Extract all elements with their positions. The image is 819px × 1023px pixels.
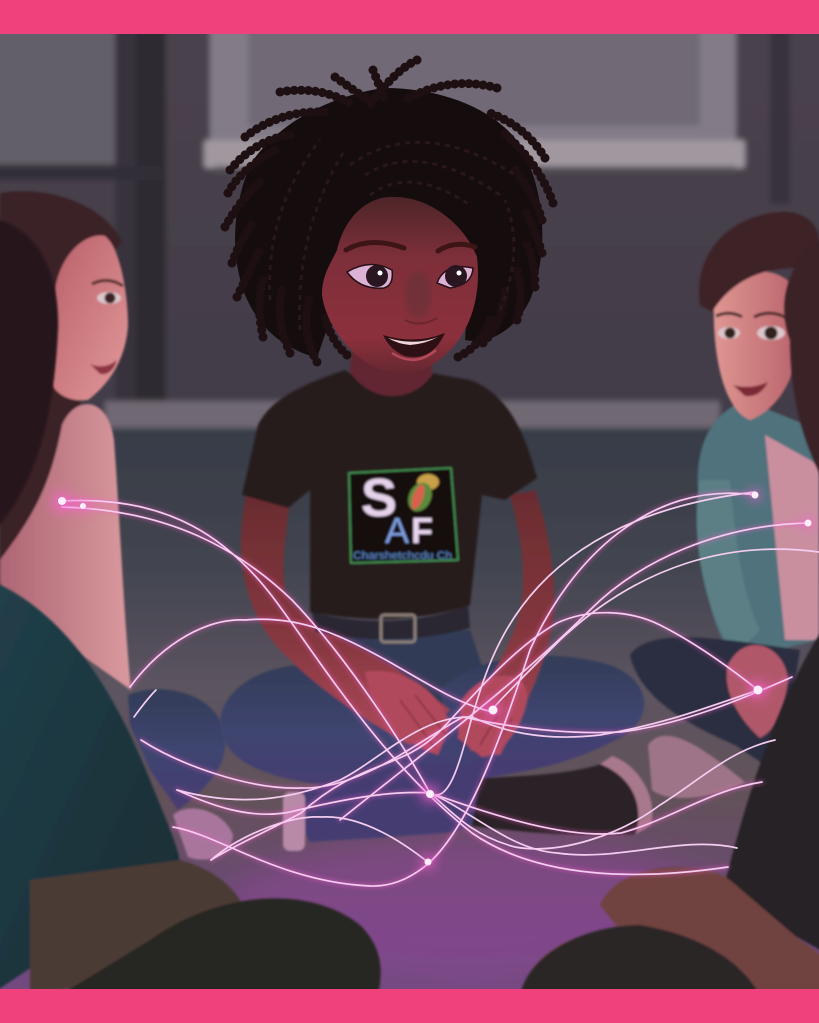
dark shoe	[472, 758, 651, 835]
face	[714, 272, 801, 420]
thread lines	[62, 492, 819, 886]
dark shirt	[722, 620, 819, 955]
left knee	[220, 664, 490, 800]
inner twists	[270, 140, 515, 330]
shirt logo	[349, 468, 458, 563]
glowing nodes	[52, 489, 814, 869]
wall	[0, 20, 819, 434]
brows	[346, 242, 475, 251]
person: left girl	[0, 191, 233, 860]
shoe	[648, 736, 745, 798]
outer curls	[225, 60, 553, 362]
t-shirt	[242, 370, 537, 619]
right knee	[440, 656, 644, 777]
mouth	[733, 382, 768, 396]
right wall column	[770, 20, 790, 204]
baseboard	[105, 401, 720, 430]
shirt logo: A	[385, 510, 409, 551]
mouth	[383, 333, 445, 360]
belt	[312, 605, 470, 642]
person: right boy	[630, 212, 819, 798]
jacket	[698, 400, 819, 660]
window	[204, 20, 745, 174]
hair mass	[235, 88, 542, 358]
lap	[300, 630, 500, 780]
center girl hair	[225, 60, 553, 362]
right arm	[470, 490, 554, 755]
person: center girl	[220, 345, 653, 851]
glowing threads	[52, 489, 819, 886]
eye brow	[92, 280, 123, 286]
floor	[0, 428, 819, 1000]
left dark column	[0, 20, 166, 459]
knee	[520, 925, 760, 995]
hair back	[0, 191, 122, 565]
shoe	[173, 808, 233, 860]
face	[50, 236, 128, 400]
thread glow	[62, 493, 808, 886]
light shoe	[283, 792, 305, 851]
eye	[97, 292, 121, 304]
legs	[630, 637, 800, 775]
floor pink glow	[230, 835, 710, 975]
nose shade	[405, 271, 431, 319]
hair	[699, 212, 819, 312]
top pink band	[0, 0, 819, 34]
shirt logo: Charshetchcdu Ch	[353, 550, 452, 562]
head	[0, 218, 58, 535]
right hair edge	[784, 235, 819, 490]
nose	[405, 318, 437, 324]
neck	[350, 345, 432, 396]
shirt logo: F	[411, 510, 433, 551]
mouth	[90, 360, 117, 374]
jacket sleeve	[697, 480, 760, 655]
left wall panel	[0, 20, 117, 164]
brows	[716, 313, 790, 320]
knee	[128, 689, 225, 810]
bottom pink band	[0, 989, 819, 1023]
logo leaf	[404, 474, 439, 515]
foreground right dark figure	[520, 235, 819, 995]
eyes	[718, 326, 785, 340]
hands	[365, 671, 527, 757]
shirt logo: S	[361, 468, 397, 528]
arm and hand	[522, 867, 819, 995]
eyes	[347, 264, 473, 288]
legs	[60, 898, 381, 995]
hand	[727, 645, 788, 738]
sleeve	[30, 860, 246, 995]
face shape	[322, 197, 478, 373]
inner shirt	[765, 435, 819, 640]
left arm	[241, 495, 450, 745]
foreground left figure	[0, 218, 381, 995]
teal shirt	[0, 580, 181, 995]
front shin	[284, 764, 492, 842]
center girl face	[322, 197, 478, 373]
torso	[0, 404, 131, 690]
